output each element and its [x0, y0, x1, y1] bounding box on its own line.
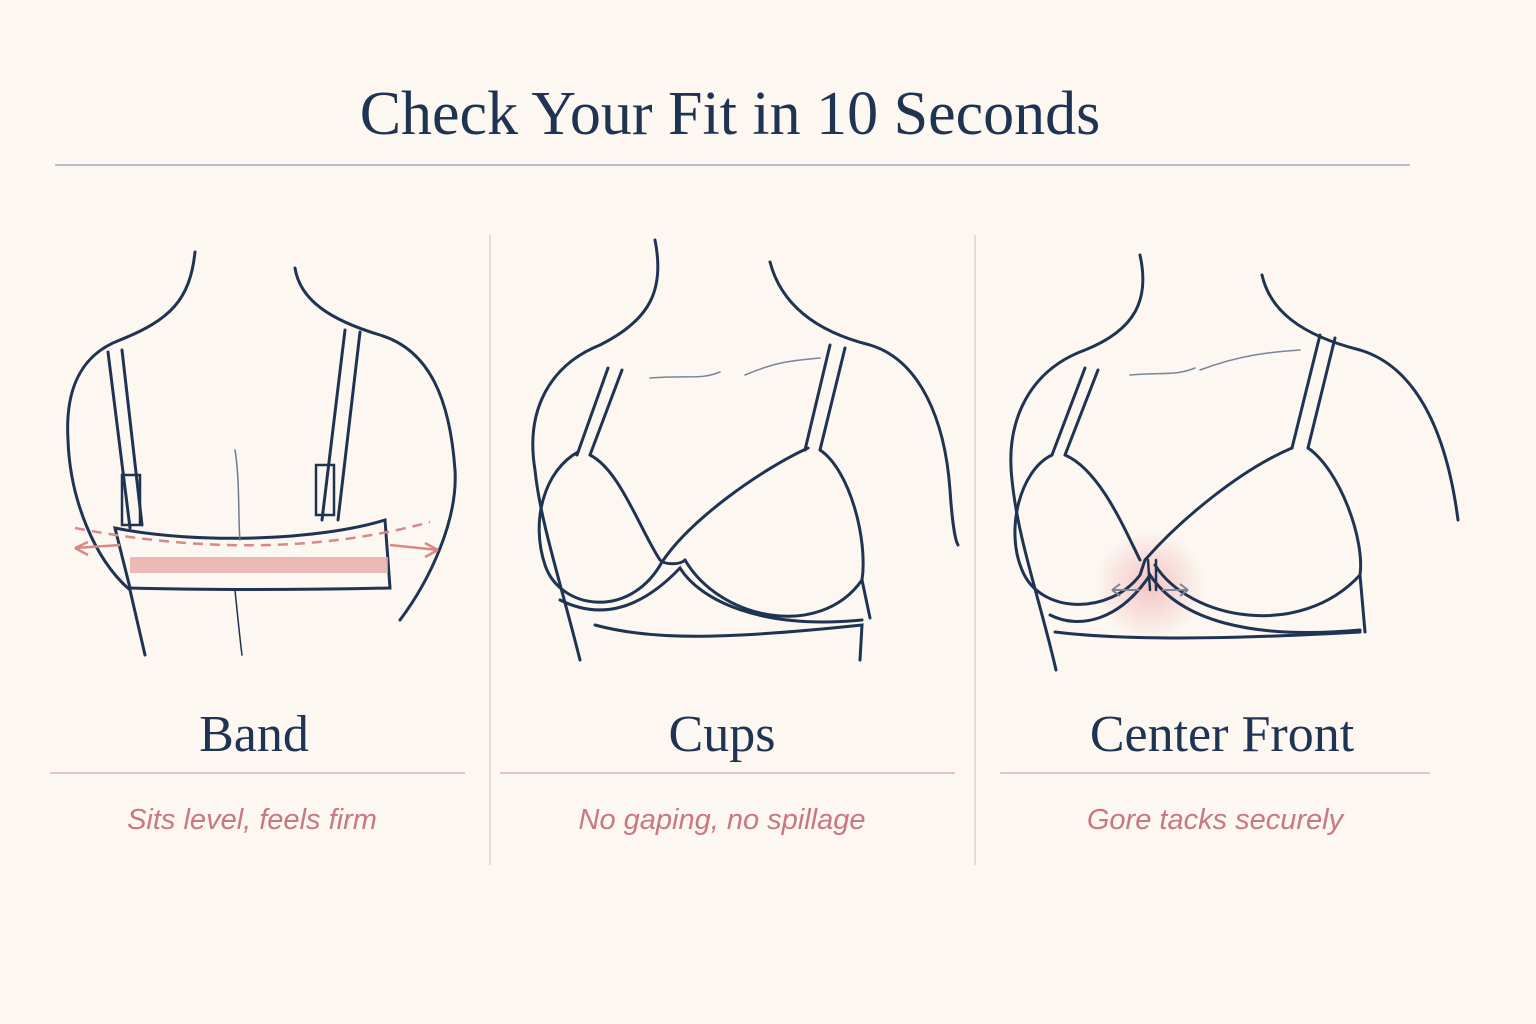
heading: cups: Cups [669, 706, 775, 763]
illustration: band (back view) [68, 252, 455, 655]
illustration: cups [533, 240, 958, 660]
caption: center front: Gore tacks securely [1087, 804, 1343, 836]
title: Check Your Fit in 10 Seconds [360, 80, 1100, 148]
caption: cups: No gaping, no spillage [578, 804, 865, 836]
heading: center front: Center Front [1090, 706, 1354, 763]
caption: band: Sits level, feels firm [127, 804, 377, 836]
heading: band: Band [199, 706, 309, 763]
